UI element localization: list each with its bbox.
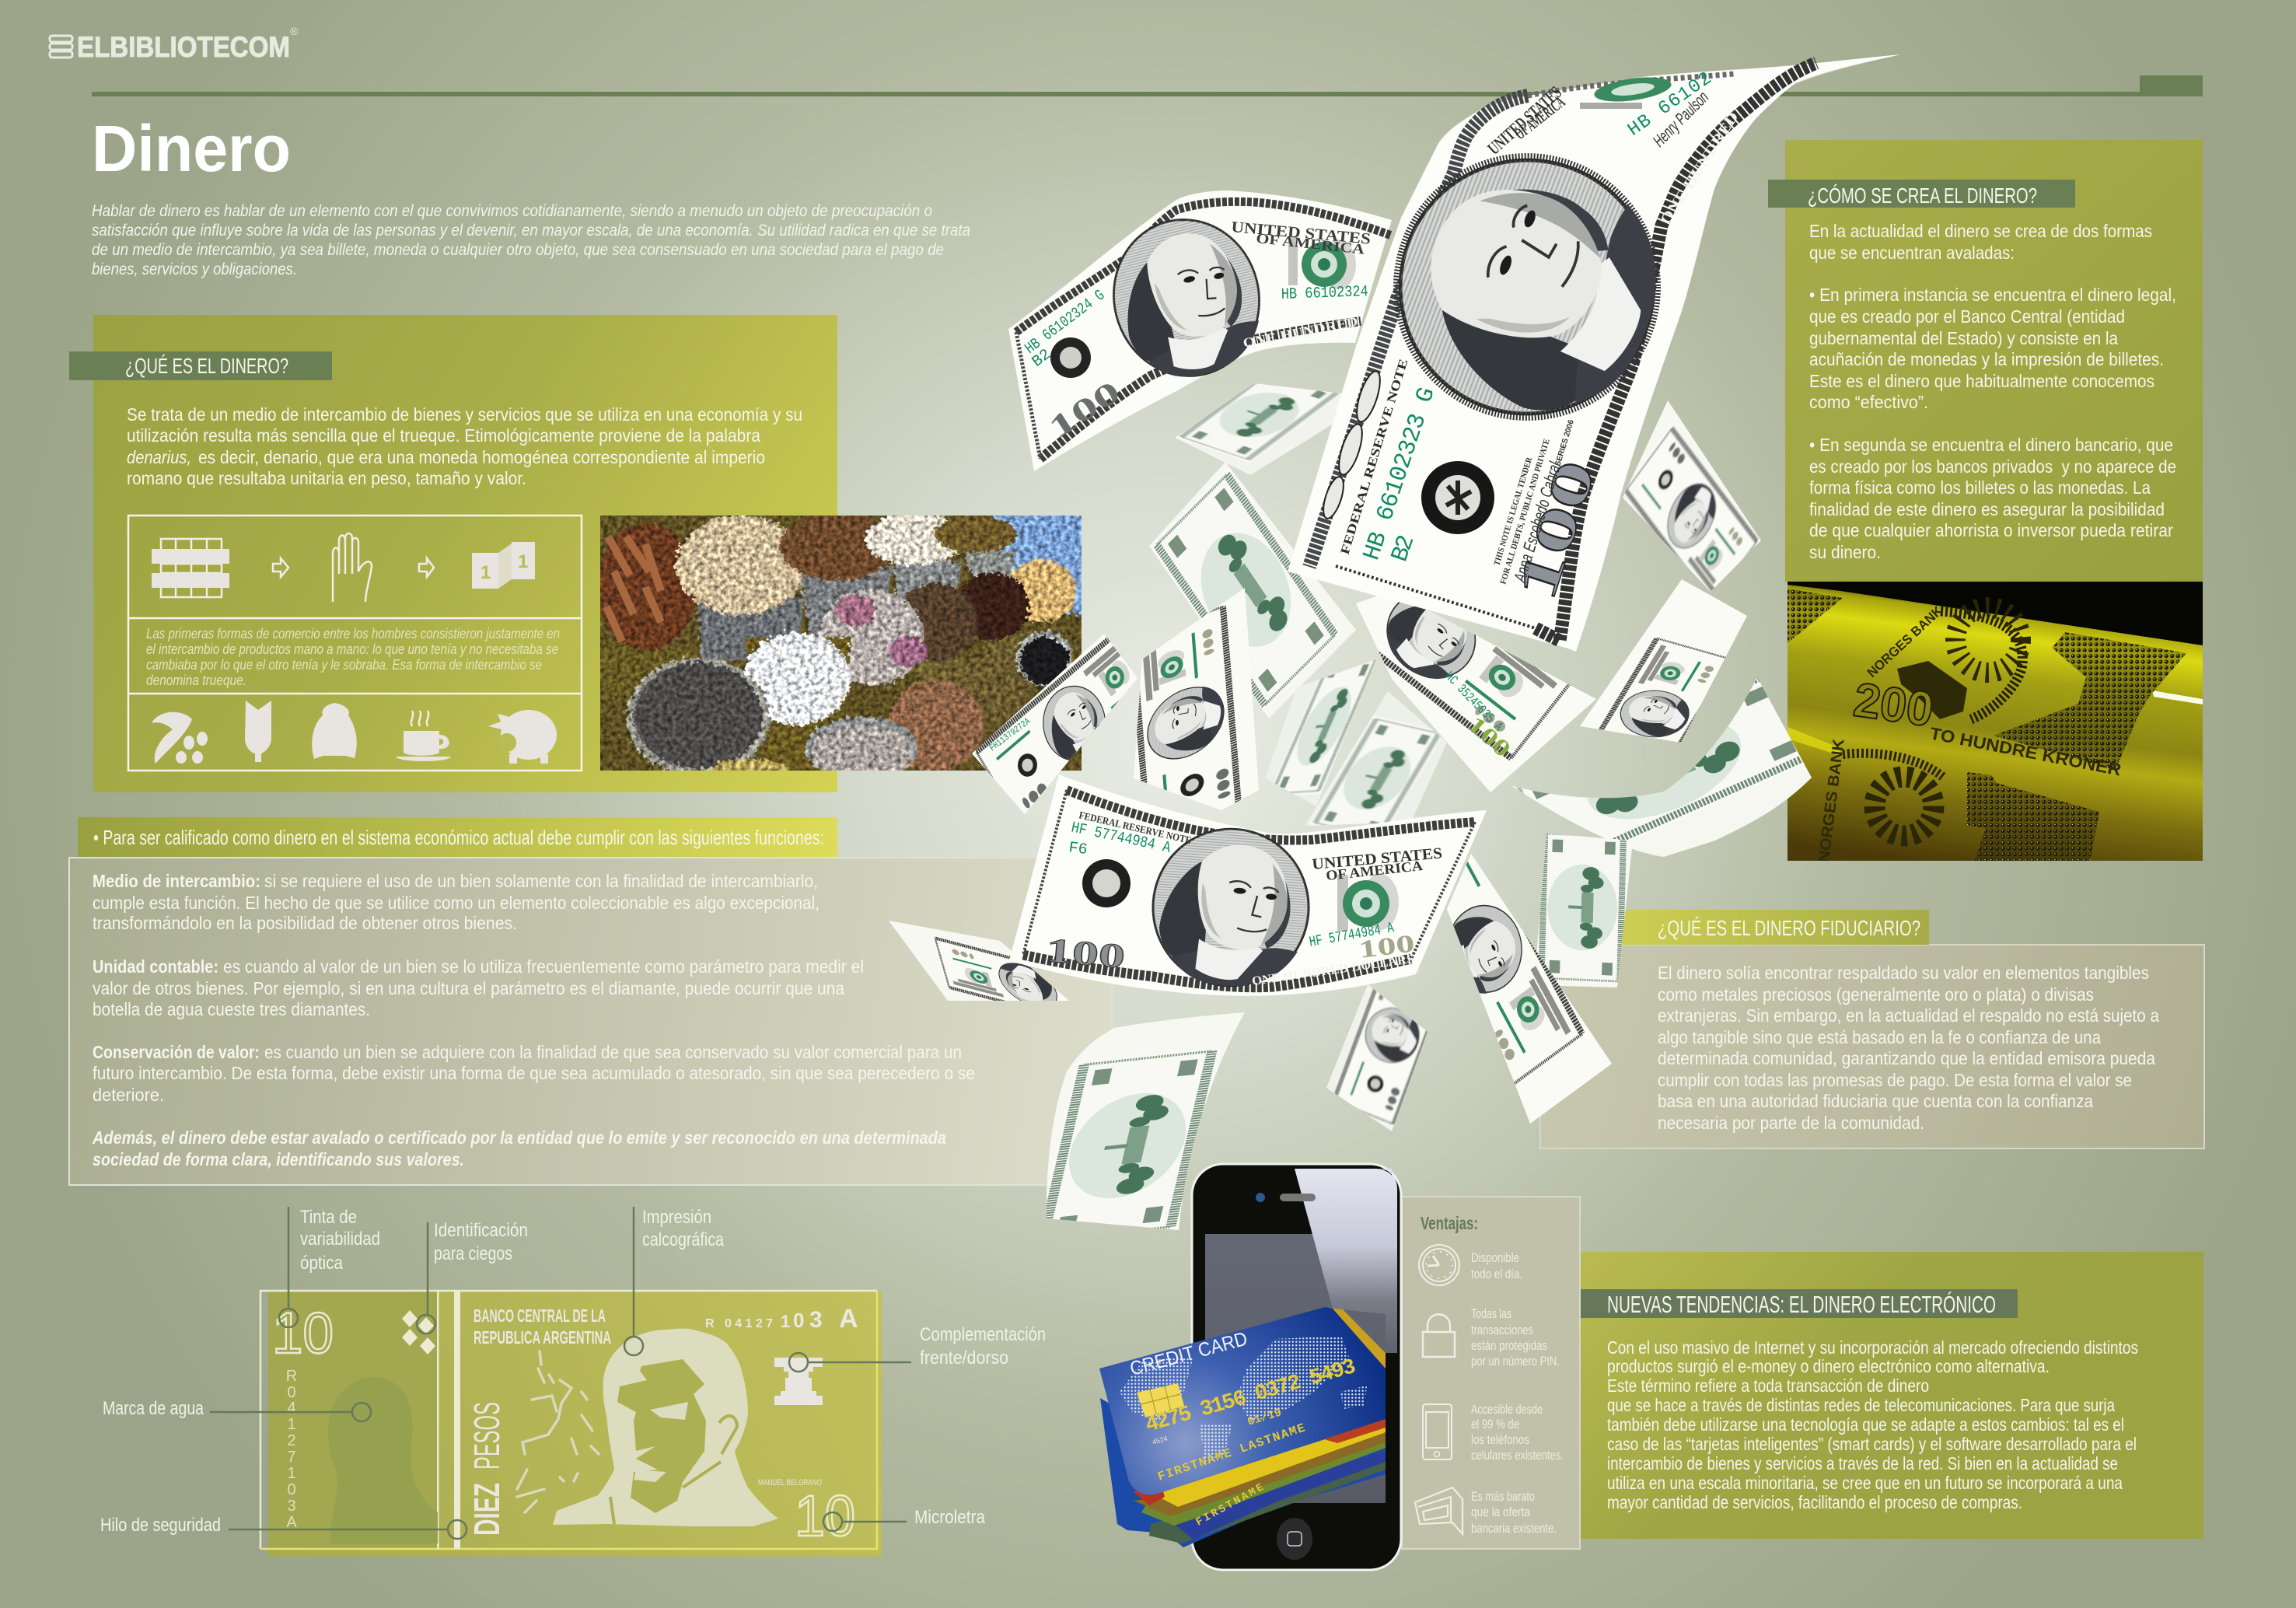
bill: main large curved: FEDERAL RESERVE NOTE [1339,358,1410,556]
smartphone [1192,1164,1401,1570]
panel: cómo se crea el dinero [1768,140,2203,582]
top card: FIRSTNAME LASTNAME [1156,1421,1307,1484]
body text: Con el uso masivo de Internet y su incorporación al mercado ofreciendo distintos [1607,1337,2138,1358]
serial number: 04127 [725,1317,773,1330]
icon: hand [333,533,372,602]
vertical serial: 1 [287,1465,296,1482]
bill: front over fiduciary panel [1381,802,1617,1127]
note body [260,1291,882,1557]
bill: lower center front: HF 57744984 A [1308,919,1396,951]
item: disponible: todo el día. [1471,1267,1522,1281]
callout: marca de agua: Marca de agua [103,1398,204,1419]
portrait: Belgrano [553,1329,778,1526]
unidad contable: botella de agua cueste tres diamantes. [93,999,370,1019]
bill: main large curved [1288,54,1901,652]
body text: acuñación de monedas y la impresión de billetes. [1809,349,2164,369]
caption [146,626,560,688]
bill: main large curved: B2 [1386,532,1421,565]
heading: cómo se crea [1768,180,2075,208]
right edge gradient [1295,1169,1397,1337]
home button [1277,1518,1312,1560]
bill: front under main: 100 [1463,711,1515,763]
unidad contable: Unidad contable: [93,956,218,977]
intro text [92,202,970,278]
body text: necesaria por parte de la comunidad. [1658,1113,1924,1133]
bill: small front left [972,634,1138,814]
bill: main large curved: ONE HUNDRED [1658,109,1742,228]
banknote diagram [100,1207,1046,1557]
callout: identificación: Identificación [434,1220,528,1241]
bill: lower center front: ONE HUNDRED DOLLARS [1251,953,1415,988]
photo: gold printing cylinder: NORGES BANK [1815,738,1848,864]
right value: 10 [795,1484,855,1548]
item: barato: bancaria existente. [1471,1521,1557,1536]
heading: nuevas tendencias: NUEVAS TENDENCIAS: EL DINERO ELECTRÓNICO [1607,1291,1996,1318]
callout: complementación: Complementación [920,1324,1046,1345]
vertical serial: 7 [287,1449,296,1466]
vertical serial: 2 [287,1432,296,1449]
body text: Este es el dinero que habitualmente conocemos [1809,371,2154,391]
nota final: sociedad de forma clara, identificando sus valores. [93,1149,464,1169]
unidad contable: valor de otros bienes. Por ejemplo, si en una cultura el parámetro es el diamante, puede ocurrir que una [93,978,844,998]
screen [1205,1234,1386,1503]
logo: ® [290,25,299,37]
conservación de valor: futuro intercambio. De esta forma, debe existir una forma de que sea acumulado o atesorado, sin que sea perecedero o se [93,1063,975,1083]
banner: funciones: • Para ser calificado como dinero en el sistema económico actual debe cumplir con las siguientes funciones: [93,826,824,849]
bill: upper left front: UNITED STATES [1231,218,1372,248]
panel: qué es el dinero [69,315,837,792]
arrow [273,558,288,577]
bill: blurred back 3 [1265,659,1376,806]
serial number: 1 [781,1312,790,1331]
heading: qué es el dinero [69,351,332,380]
caption: cambiaba por lo que el otro tenía y le sobraba. Esa forma de intercambio se [146,657,542,673]
body text: finalidad de este dinero es asegurar la posibilidad [1809,499,2165,519]
medio de intercambio: cumple esta función. El hecho de que se utilice como un elemento coleccionable es algo excepcional, [93,893,820,913]
callout: identificación [417,1220,528,1334]
bill: small front left: FH11379272A [987,715,1033,753]
bill: back 2 [1143,459,1361,723]
item: barato: Es más barato [1471,1489,1535,1504]
icon: exchanged bills [472,542,535,589]
body text: cumplir con todas las promesas de pago. De esta forma el valor se [1658,1070,2132,1090]
bill: front, behind lower bill [889,921,1069,1001]
body text: como metales preciosos (generalmente oro o plata) o divisas [1658,984,2094,1005]
body text: extranjeras. Sin embargo, en la actualidad el respaldo no está sujeto a [1658,1005,2159,1026]
vertical serial: A [286,1514,297,1531]
camera and speaker [1256,1193,1316,1202]
conservación de valor: deteriore. [93,1085,164,1105]
body text: denarius, [127,447,191,467]
body text: • En primera instancia se encuentra el dinero legal, [1809,285,2176,305]
heading: fiduciario [1620,910,1929,945]
body text: algo tangible sino que está basado en la fe o confianza de una [1658,1027,2101,1047]
unidad contable: es cuando al valor de un bien se lo utiliza frecuentemente como parámetro para medir el [223,956,864,977]
left value: 10 [272,1301,334,1365]
serial number: A [839,1304,858,1334]
icon: exchanged bills: 1 [518,551,528,572]
medio de intercambio: Medio de intercambio: [93,871,260,891]
top card [1099,1307,1386,1494]
callout: tinta: variabilidad [300,1229,380,1250]
item: barato: que la oferta [1471,1505,1530,1519]
screen glare [1295,1169,1397,1353]
nota final: Además, el dinero debe estar avalado o certificado por la entidad que lo emite y ser reconocido en una determinada [92,1127,946,1148]
bill: blurred front right [1623,400,1761,592]
bill: main large curved: THIS NOTE IS LEGAL TENDER [1492,456,1535,567]
bill: lower center front: UNITED STATES [1312,844,1443,873]
name: MANUEL BELGRANO [758,1478,822,1487]
callout: tinta: Tinta de [300,1207,357,1228]
callout: microletra: Microletra [914,1507,986,1528]
bill: back curved right [1512,677,1812,857]
icon: exchanged bills: 1 [481,562,491,583]
bill: upper left front: HB 66102324 G [1022,287,1109,358]
callout: tinta [279,1207,380,1327]
bill: main large curved: Anna Escobedo Cabral [1509,459,1565,586]
item: accesible: Accesible desde [1471,1402,1543,1417]
body text: es creado por los bancos privados y no aparece de [1809,456,2176,477]
bill: back right [1532,824,1637,991]
arrow [419,558,434,577]
intro text: satisfacción que influye sobre la vida de las personas y el devenir, en mayor escala, de una economía. Su utilidad radica en que se trata [92,222,970,239]
body text: como “efectivo”. [1809,392,1928,412]
icon: pod and seeds [152,712,208,764]
serial number: 3 [809,1307,823,1333]
callout: marca de agua [103,1398,371,1421]
medio de intercambio: si se requiere el uso de un bien solamente con la finalidad de intercambiarlo, [264,871,818,891]
top card: 4275 3156 0372 5493 [1143,1355,1359,1438]
body text: • En segunda se encuentra el dinero bancario, que [1809,435,2173,455]
vertical serial: 1 [287,1416,296,1433]
icon: cup [396,711,451,761]
bill: main large curved: Henry Paulson [1649,87,1712,151]
intro text: de un medio de intercambio, ya sea billete, moneda o cualquier otro objeto, que sea consensuado en una sociedad para el pago de [92,241,944,259]
body text: basa en una autoridad fiduciaria que cuenta con la confianza [1658,1091,2093,1111]
watermark portrait [328,1377,438,1543]
bill: main large curved: HB 66102 [1624,68,1716,142]
item: seguridad: transacciones [1471,1323,1533,1337]
nota final [92,1127,946,1169]
icon: sack [312,703,357,759]
body text [1607,1337,2138,1512]
intro text: bienes, servicios y obligaciones. [92,260,297,278]
body text: utiliza en una escala minoritaria, se cree que en un futuro se incorporará a una [1607,1473,2123,1493]
item: barato [1415,1487,1557,1536]
denomination vertical [467,1402,507,1536]
denomination vertical: DIEZ [467,1483,507,1536]
body text: su dinero. [1809,542,1881,562]
caption: el intercambio de productos mano a mano: lo que uno tenía y no necesitaba se [146,641,558,657]
body text [1658,963,2159,1133]
photo: gold printing cylinder: 200 [1850,673,1937,737]
bill: lower center front: F6 [1068,839,1089,859]
body text: que es creado por el Banco Central (entidad [1809,306,2125,327]
medio de intercambio [93,871,820,933]
item: accesible: el 99 % de [1471,1417,1519,1431]
body text: utilización resulta más sencilla que el trueque. Etimológicamente proviene de la palabra [127,425,760,446]
bank name: BANCO CENTRAL DE LA [474,1306,606,1326]
body text: mayor cantidad de servicios, facilitando el proceso de compras. [1607,1492,2022,1512]
heading: cómo se crea: ¿CÓMO SE CREA EL DINERO? [1808,184,2037,208]
item: seguridad [1423,1306,1560,1369]
body text: El dinero solía encontrar respaldado su valor en elementos tangibles [1658,963,2149,983]
diamonds [402,1310,435,1355]
bill: front under main: HC 35245035 A [1442,669,1505,735]
bill: upper left front [1008,191,1392,471]
photo: spice market [600,516,1082,771]
bank name: REPUBLICA ARGENTINA [474,1327,611,1348]
body text: En la actualidad el dinero se crea de dos formas [1809,221,2152,241]
top card: CREDIT CARD [1127,1328,1249,1380]
credit cards [1099,1307,1386,1547]
denomination vertical: PESOS [467,1402,507,1470]
item: accesible [1423,1402,1564,1463]
heading: fiduciario: ¿QUÉ ES EL DINERO FIDUCIARIO? [1658,916,1920,940]
vertical serial [286,1368,297,1531]
bill: main large curved: HB 66102323 G [1358,384,1442,564]
body text: romano que resultaba unitaria en peso, tamaño y valor. [127,468,526,488]
card world map [1120,1336,1367,1462]
logo: ELBIBLIOTECOM [77,31,290,63]
top rule [92,75,2203,96]
bill: lower center front: HF 57744984 A [1070,819,1172,858]
callout: impresión: Impresión [642,1207,711,1228]
body text [1809,221,2176,562]
icon: animal [488,710,557,764]
body text: intercambio de bienes y servicios a través de la red. Si bien en la actualidad se [1607,1453,2118,1473]
body text: de que cualquier ahorrista o inversor pueda retirar [1809,520,2173,540]
top card: 01/19 [1246,1406,1284,1429]
panel: ventajas [1402,1197,1580,1549]
bill: small dark blurred [1322,942,1455,1135]
vertical serial: 0 [287,1384,296,1401]
item: accesible: los teléfonos [1471,1432,1529,1447]
heading: nuevas tendencias [1581,1289,2018,1318]
body text: Se trata de un medio de intercambio de bienes y servicios que se utiliza en una economía y su [127,404,802,425]
body text: que se hace a través de distintas redes de telecomunicaciones. Para que surja [1607,1395,2115,1415]
item: seguridad: están protegidas [1471,1338,1547,1353]
bill: upper left front: HB 66102324 [1281,283,1368,304]
bill: blurred back 1 [1175,383,1342,475]
emblem [774,1358,823,1405]
bill: upper left front: B2 [1029,346,1054,372]
body text: es decir, denario, que era una moneda homogénea correspondiente al imperio [198,447,765,467]
bill: blurred back 4 [1305,691,1447,826]
item: disponible: Disponible [1471,1250,1519,1265]
callout: microletra [823,1507,986,1531]
heading: qué es el dinero: ¿QUÉ ES EL DINERO? [125,354,288,378]
body text: también debe utilizarse una tecnología que se adapte a estos cambios: tal es el [1607,1414,2124,1435]
bill: lower center front: 100 [1044,931,1127,976]
bill: upper left front: OF AMERICA [1256,230,1365,257]
body text [127,404,802,488]
item: accesible: celulares existentes. [1471,1448,1564,1463]
caption: denomina trueque. [146,673,246,688]
bill: main large curved: 100 [1504,453,1608,607]
bill: upper left front: 100 [1042,373,1127,446]
icon: bricks [152,539,229,597]
trueque diagram box [128,516,582,771]
bill: main large curved: FOR ALL DEBTS, PUBLIC AND PRIVATE [1498,438,1552,586]
title: Dinero [92,112,291,185]
callout: complementación: frente/dorso [920,1348,1008,1369]
vertical serial: 0 [287,1481,296,1498]
panel: nuevas tendencias [1581,1252,2203,1539]
vertical serial: 3 [287,1498,296,1515]
icon: wheat [245,701,271,762]
bill: front under main [1356,596,1596,792]
bill: main large curved: SERIES 2006 [1553,418,1576,467]
photo: gold printing cylinder: NORGES BANK [1864,603,1946,680]
body text: determinada comunidad, garantizando que la entidad emisora pueda [1658,1048,2155,1068]
callout: hilo de seguridad: Hilo de seguridad [100,1515,221,1536]
bill: lower center front: OF AMERICA [1325,858,1424,883]
item: seguridad: por un número PIN. [1471,1354,1560,1369]
lower card text: FIRSTNAME [1194,1481,1266,1529]
conservación de valor [93,1042,975,1105]
medio de intercambio: transformándolo en la posibilidad de obtener otros bienes. [93,913,517,933]
bill: main large curved: OF AMERICA [1511,93,1569,143]
panel: qué es el dinero fiduciario [1540,910,2204,1148]
unidad contable [93,956,864,1019]
bill: back, bottom left [1047,1012,1245,1230]
bank name [474,1306,611,1348]
photo: gold printing cylinder: TO HUNDRE KRONER [1928,723,2123,780]
item: disponible [1419,1245,1522,1285]
body text: productos surgió el e-money o dinero electrónico como alternativa. [1607,1356,2050,1376]
bill: small front right [1572,575,1749,793]
bill: narrow front [1134,588,1259,810]
top card: 4524 [1151,1435,1169,1446]
serial number: 0 [793,1309,804,1332]
callout: tinta: óptica [300,1253,344,1274]
bill: lower center front: FEDERAL RESERVE NOTE [1078,809,1193,846]
callout: hilo de seguridad [100,1515,467,1539]
vertical serial: R [286,1368,297,1385]
callout: identificación: para ciegos [434,1243,512,1264]
photo: gold printing cylinder [1788,582,2203,866]
body text: gubernamental del Estado) y consiste en la [1809,328,2118,348]
serial number: R [705,1317,715,1330]
map [517,1351,599,1512]
bill: upper left front: ONE HUNDRED [1242,314,1359,351]
panel: funciones del dinero [69,858,1112,1185]
body text: que se encuentran avaladas: [1809,243,2015,263]
vertical serial: 4 [287,1400,296,1417]
body text: forma física como los billetes o las monedas. La [1809,477,2151,498]
bill: lower center front: 100 [1357,928,1416,963]
banner: funciones [78,817,837,857]
intro text: Hablar de dinero es hablar de un elemento con el que convivimos cotidianamente, siendo a menudo un objeto de preocupación o [92,202,932,220]
callout: impresión [624,1207,725,1355]
callout: complementación [789,1324,1046,1372]
body text: caso de las “tarjetas inteligentes” (smart cards) y el software desarrollado para el [1607,1434,2137,1454]
heading: ventajas: Ventajas: [1421,1213,1478,1233]
body text: Este término refiere a toda transacción de dinero [1607,1376,1929,1396]
serial number [705,1304,858,1334]
conservación de valor: Conservación de valor: [93,1042,260,1062]
callout: impresión: calcográfica [642,1229,725,1250]
caption: Las primeras formas de comercio entre los hombres consistieron justamente en [146,626,560,641]
item: seguridad: Todas las [1471,1306,1511,1321]
bill: main large curved: UNITED STATES [1484,82,1565,159]
conservación de valor: es cuando un bien se adquiere con la finalidad de que sea conservado su valor comercial para un [264,1042,962,1062]
bill: lower center front [1009,774,1487,996]
